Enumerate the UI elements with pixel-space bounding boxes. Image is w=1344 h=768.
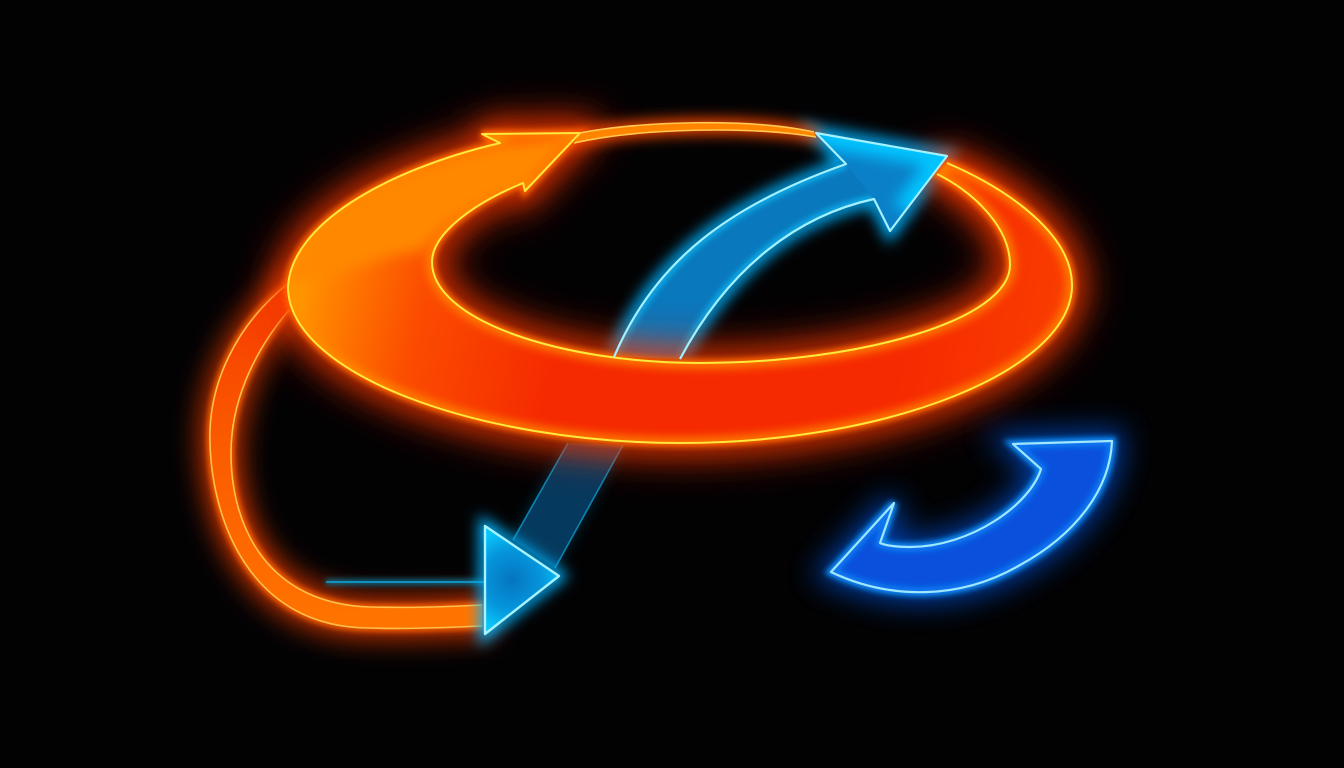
orange tail arrow sweeping down to the triangle [210,282,482,628]
cyan curved arrow crossing the ring [614,133,947,359]
dim blue shaft behind the ring [513,443,623,568]
cyan arrowhead and outline over the ring [614,133,947,359]
thin cyan line into the triangle [326,580,484,584]
thin top band of the ring [574,123,816,143]
diagram: neon arrows [178,87,1143,660]
orange ring glow [288,133,1072,443]
cyan triangle arrowhead [485,526,559,634]
blue swoosh arrow [831,441,1112,592]
orange ring with arrowhead [288,133,1072,443]
